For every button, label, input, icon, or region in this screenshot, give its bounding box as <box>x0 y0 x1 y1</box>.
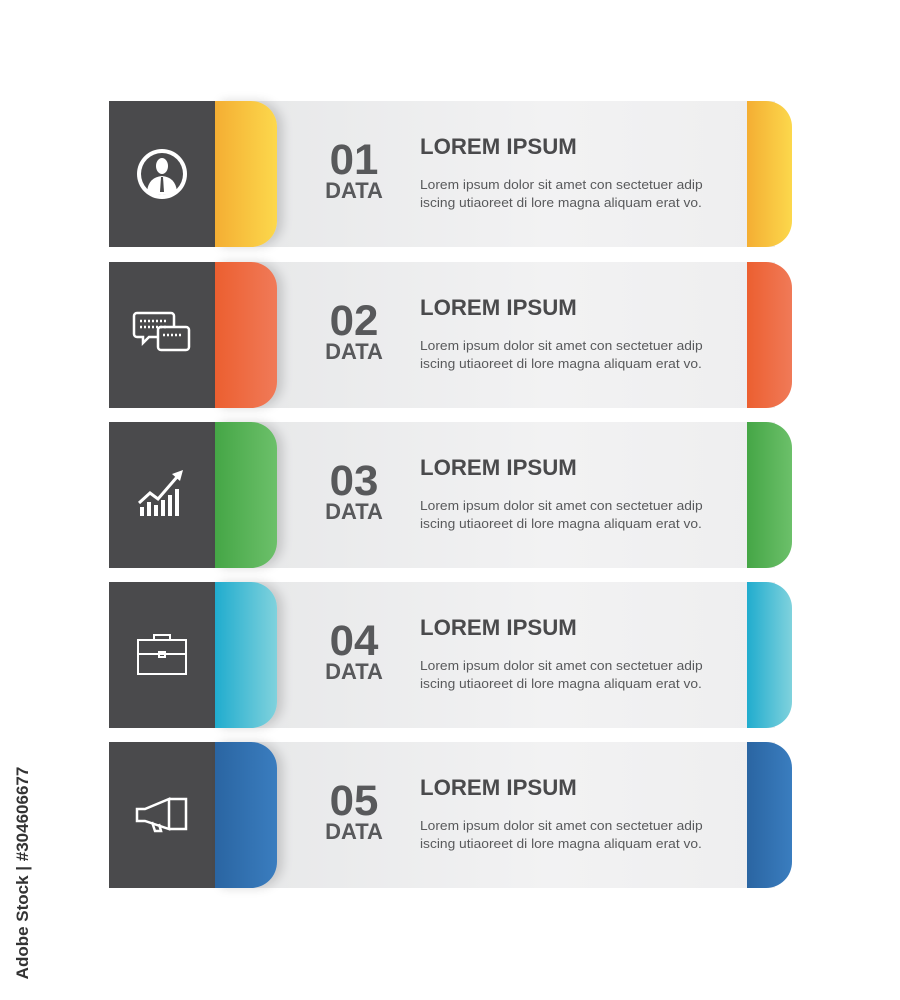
color tab 2 <box>215 262 277 408</box>
heading 1: LOREM IPSUM <box>420 134 577 159</box>
row 2: 02 <box>330 297 378 345</box>
color tab 3 <box>215 422 277 568</box>
text 5: iscing utiaoreet di lore magna aliquam erat vo. <box>420 836 702 851</box>
text 1: Lorem ipsum dolor sit amet con sectetuer adip <box>420 177 703 192</box>
text 5 <box>420 818 703 851</box>
text 1 <box>420 177 703 210</box>
row 4: 04 <box>330 617 378 665</box>
heading 5: LOREM IPSUM <box>420 775 577 800</box>
text 4 <box>420 658 703 691</box>
vertical stock id text: Adobe Stock | #304606677 <box>13 767 32 979</box>
color tab 5 <box>215 742 277 888</box>
text 3: Lorem ipsum dolor sit amet con sectetuer adip <box>420 498 703 513</box>
row 2 <box>109 258 792 412</box>
text 5: Lorem ipsum dolor sit amet con sectetuer adip <box>420 818 703 833</box>
row 5 <box>109 738 792 892</box>
text 2 <box>420 338 703 371</box>
color tab 4 <box>215 582 277 728</box>
text 1: iscing utiaoreet di lore magna aliquam erat vo. <box>420 195 702 210</box>
text 4: iscing utiaoreet di lore magna aliquam erat vo. <box>420 676 702 691</box>
row 4 <box>109 578 792 732</box>
heading 4: LOREM IPSUM <box>420 615 577 640</box>
row 1: DATA <box>325 178 383 203</box>
row 1 <box>109 98 792 250</box>
icon: briefcase <box>137 634 187 675</box>
row 4: DATA <box>325 659 383 684</box>
heading 3: LOREM IPSUM <box>420 455 577 480</box>
icon: chat <box>132 312 190 352</box>
text 3 <box>420 498 703 531</box>
row 2: DATA <box>325 339 383 364</box>
text 4: Lorem ipsum dolor sit amet con sectetuer adip <box>420 658 703 673</box>
text 3: iscing utiaoreet di lore magna aliquam erat vo. <box>420 516 702 531</box>
row 5: DATA <box>325 819 383 844</box>
heading 2: LOREM IPSUM <box>420 295 577 320</box>
icon: chart <box>138 470 183 516</box>
number 01: 01 <box>330 136 378 184</box>
row 3 <box>109 418 792 572</box>
text 2: Lorem ipsum dolor sit amet con sectetuer adip <box>420 338 703 353</box>
text 2: iscing utiaoreet di lore magna aliquam erat vo. <box>420 356 702 371</box>
row 5: 05 <box>330 777 378 825</box>
color tab 1 <box>215 101 277 247</box>
row 3: DATA <box>325 499 383 524</box>
row 3: 03 <box>330 457 378 505</box>
icon: megaphone <box>136 797 188 832</box>
icon: person <box>137 149 187 199</box>
